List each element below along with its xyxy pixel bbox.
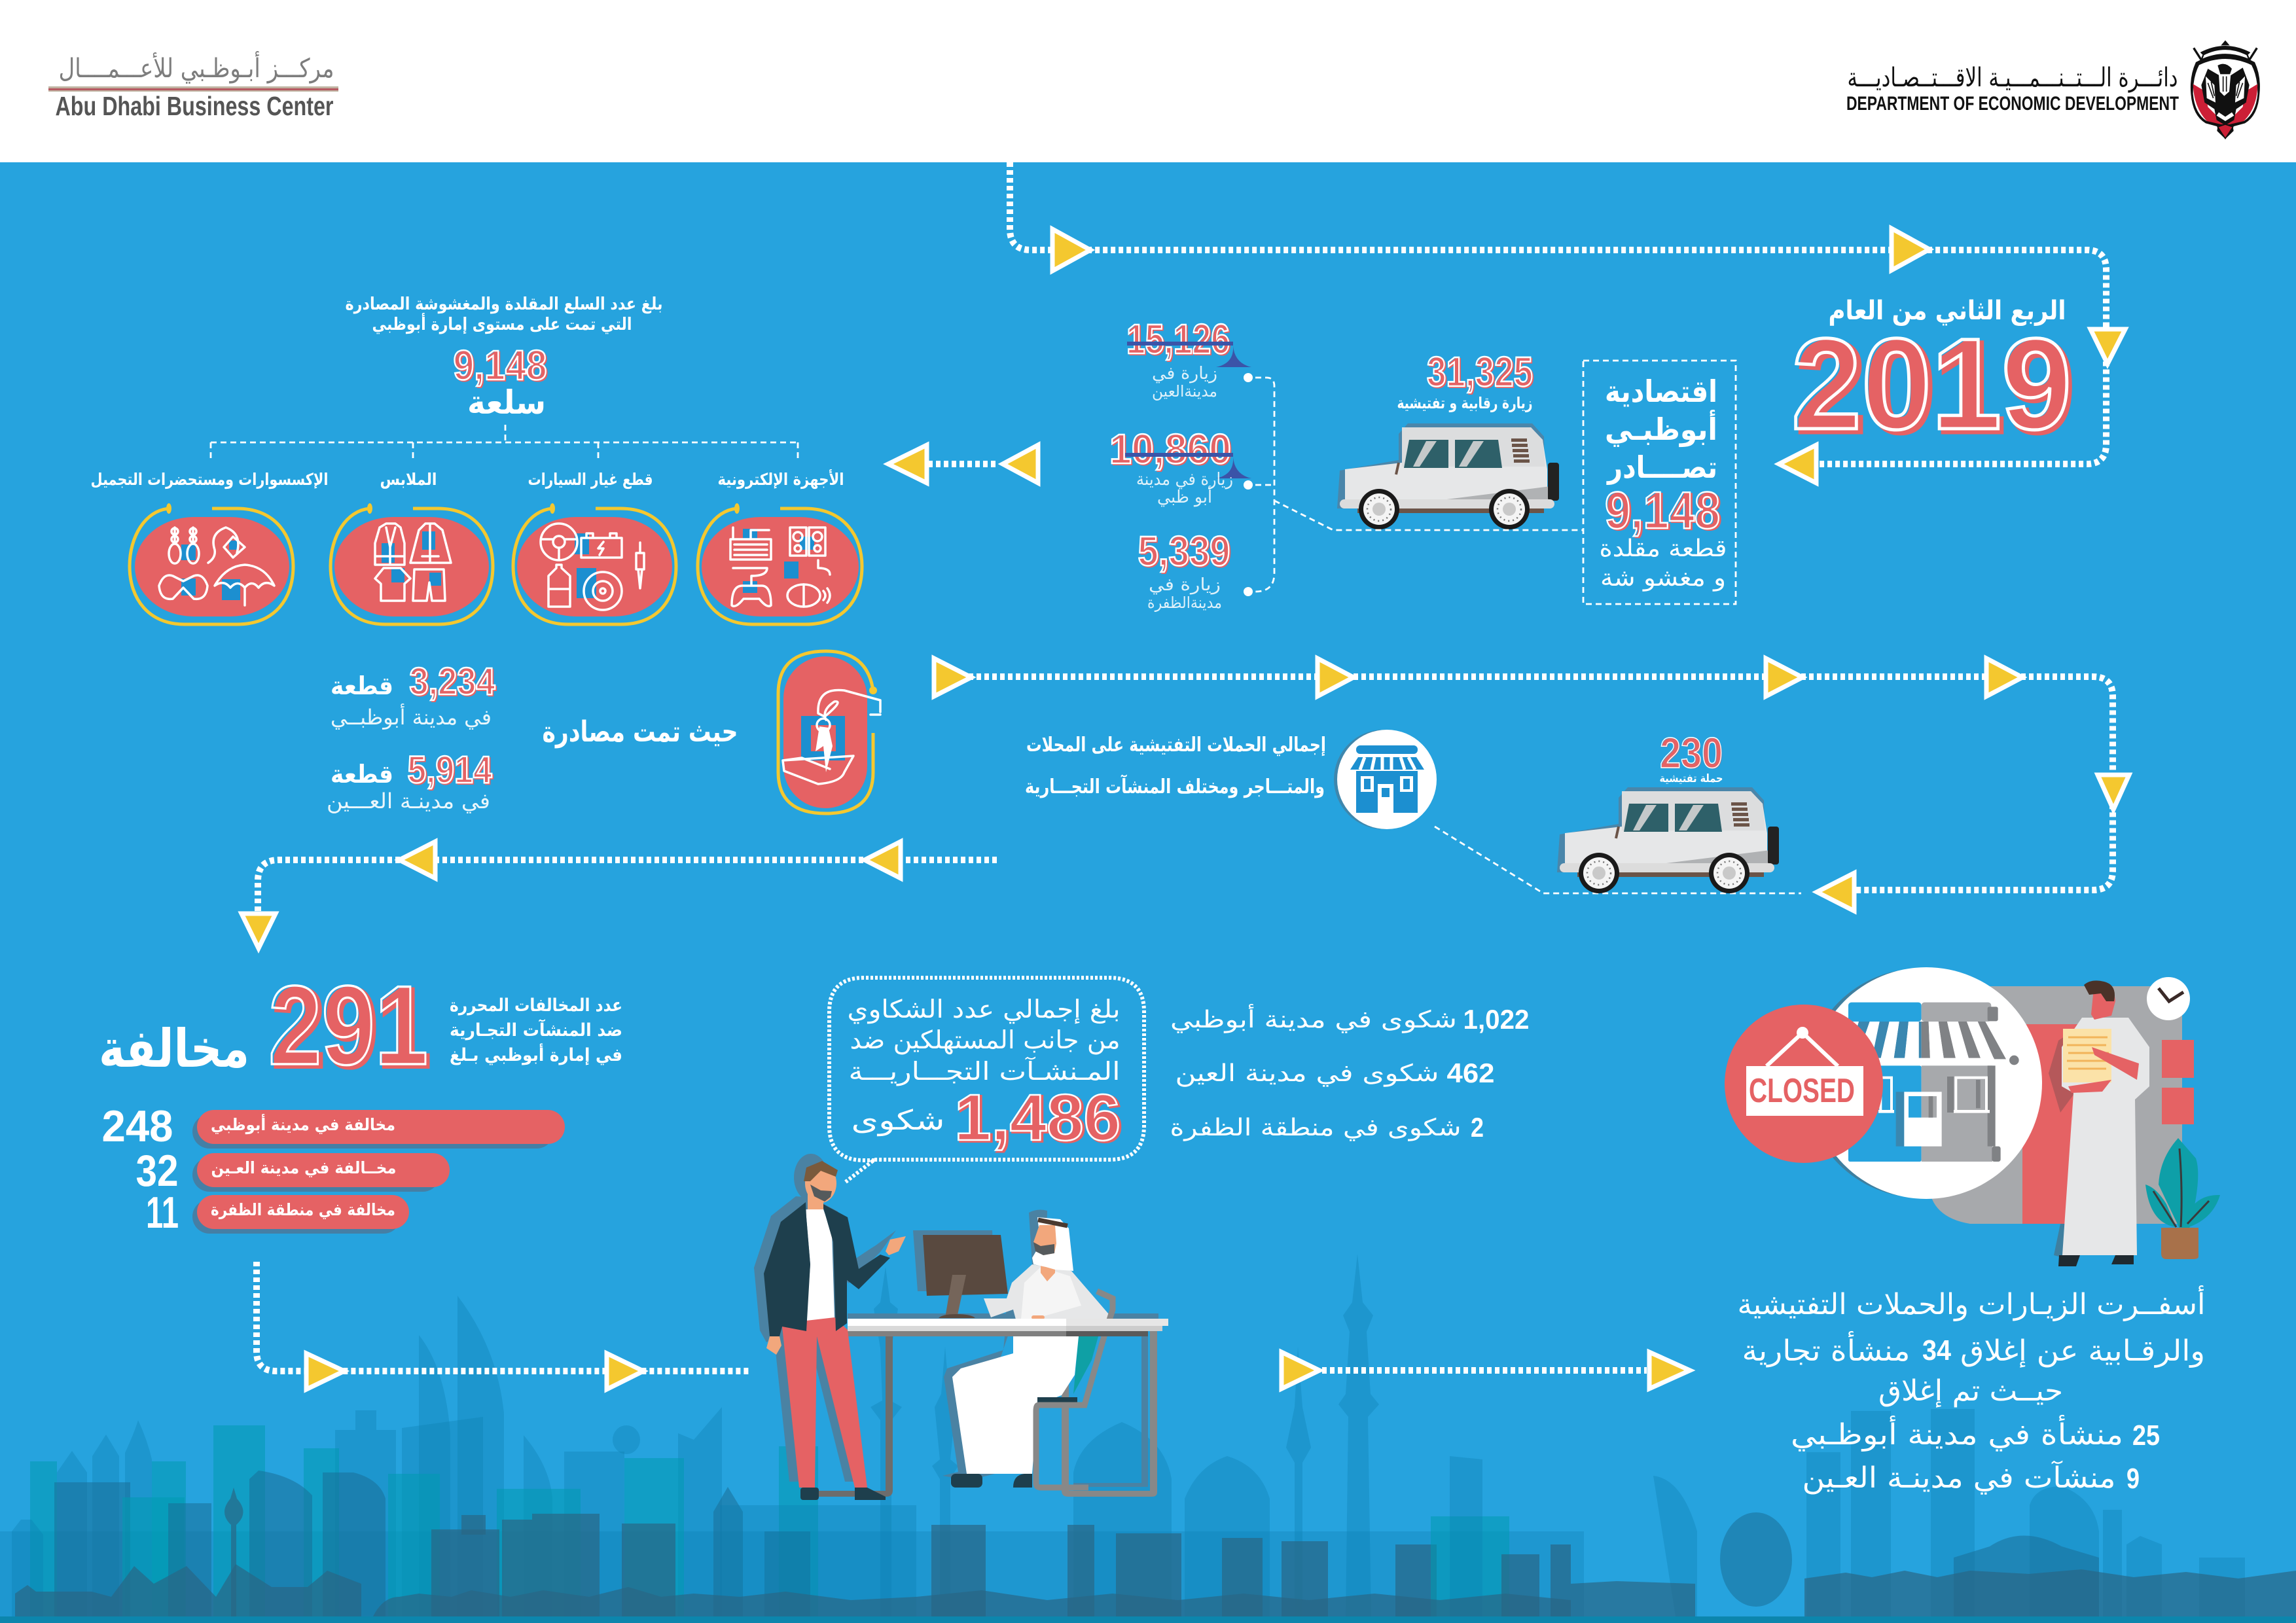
panel: confiscation summary box: تصــــادر <box>1606 450 1717 485</box>
text: confiscated goods intro: التي تمت على مستوى إمارة أبوظبي <box>372 313 632 334</box>
circle with store <box>1805 967 2042 1199</box>
bar: Abu Dhabi 248: 248 <box>102 1101 173 1151</box>
flow line: to closures <box>1282 1352 1690 1389</box>
text: closures summary <box>1737 1285 2206 1495</box>
list: complaints by region: 462 <box>1446 1058 1495 1088</box>
stat: 5,339 Al Dhafra: 5,339 <box>1138 527 1230 575</box>
flow line: to confiscated goods <box>888 445 1038 483</box>
illustration: closed shop <box>1725 967 2220 1266</box>
pill: electronics <box>698 503 862 624</box>
red panel <box>2022 1024 2078 1224</box>
stat: 5,339 Al Dhafra: 5,339 <box>1139 529 1232 576</box>
stat: 3,234 Abu Dhabi: في مدينة أبوظبــي <box>331 704 492 730</box>
arrow right <box>1282 1352 1319 1389</box>
stat: 31,325 visits: 31,325 <box>1428 349 1534 397</box>
text: closures summary: منشآت في مدينـة العـين <box>1803 1460 2115 1495</box>
awning stripes <box>1848 1022 2019 1065</box>
bar: Abu Dhabi 248: مخالفة في مدينة أبوظبي <box>211 1114 395 1135</box>
stat: 10,860 Abu Dhabi: 10,860 <box>1109 425 1231 473</box>
man with papers <box>2049 980 2149 1266</box>
arrow left <box>1003 445 1038 483</box>
text: closures summary: 34 <box>1922 1334 1951 1366</box>
arrow left <box>399 842 435 878</box>
illustration: car <box>1557 787 1779 893</box>
list: complaints by region: 2 <box>1471 1112 1484 1143</box>
illustration: car <box>1337 423 1559 529</box>
stat: 15,126 Al Ain: 15,126 <box>1128 317 1231 364</box>
bar: Al Dhafra 11: 11 <box>146 1188 179 1238</box>
text: closures summary: منشأة في مدينة أبوظـبي <box>1791 1414 2123 1452</box>
stat: 31,325 visits: 31,325 <box>1427 348 1533 395</box>
stat: 5,914 Al Ain: في مدينـة العـــين <box>327 789 490 813</box>
stat: 10,860 Abu Dhabi <box>1109 425 1253 507</box>
stat: 5,914 Al Ain: قطعة <box>331 760 393 789</box>
arrow right <box>1052 229 1090 271</box>
arrow down <box>242 914 276 948</box>
closed sign <box>1725 1005 1883 1163</box>
number: 9,148 goods: 9,148 <box>454 343 548 390</box>
bar: Al Ain 32: مخــالفة في مدينة العـين <box>211 1158 397 1178</box>
stat: 3,234 Abu Dhabi: قطعة <box>331 671 393 700</box>
stat: 230 campaigns: 230 <box>1660 729 1723 777</box>
panel: confiscation summary box: اقتصادية <box>1605 374 1717 409</box>
bar: Al Ain 32: 32 <box>136 1146 178 1196</box>
arrow right <box>1986 658 2022 696</box>
stat: 5,914 Al Ain: 5,914 <box>408 750 493 793</box>
stat: 10,860 Abu Dhabi: 10,860 <box>1111 427 1232 474</box>
arrow right <box>934 658 971 696</box>
number 1,486: 1,486 <box>956 1082 1122 1156</box>
year 2019: 2019 <box>1791 312 2072 456</box>
bar: Abu Dhabi 248 <box>102 1101 565 1151</box>
number 9,148: 9,148 <box>1607 482 1722 541</box>
callout: complaints speech bubble: من جانب المستهلكين ضد <box>850 1026 1121 1055</box>
monitor <box>913 1230 1008 1318</box>
text: closures summary: 25 <box>2132 1419 2160 1452</box>
stat: 15,126 Al Ain <box>1126 315 1253 401</box>
man shadow <box>754 1154 896 1482</box>
text: violations description <box>450 995 622 1065</box>
arrow down <box>2098 775 2129 810</box>
number: 291 violations: 291 <box>272 965 431 1091</box>
desk shadow <box>848 1313 1158 1319</box>
callout: complaints speech bubble: بلغ إجمالي عدد الشكاوي <box>847 995 1121 1024</box>
heading: second quarter: الربع الثاني من العام <box>1829 296 2066 326</box>
panel: confiscation summary box: قطعة مقلدة <box>1600 535 1727 562</box>
flow line: to violations <box>242 842 997 948</box>
clock <box>2147 977 2190 1020</box>
arrow right <box>1766 658 1803 696</box>
flow line: to complaints <box>257 1262 751 1389</box>
connector lines for visits <box>1255 378 1583 592</box>
tree connector <box>211 425 798 459</box>
scalloped edge <box>1872 1058 1994 1064</box>
logo: Department of Economic Development <box>1846 63 2179 115</box>
chair back <box>1073 1336 1098 1394</box>
white awning stripes <box>1857 1022 1994 1059</box>
chair frame <box>1036 1291 1113 1488</box>
pill: car parts <box>513 503 676 624</box>
year 2019: 2019 <box>1796 315 2075 459</box>
icon: store in circle <box>1334 730 1437 829</box>
panel: confiscation summary box: و مغشو شة <box>1600 565 1726 592</box>
grey panel <box>1929 986 2182 1224</box>
arrow down <box>2090 329 2125 364</box>
text: closures summary: أسفــرت الزيـارات والحملات التفتيشية <box>1737 1285 2206 1321</box>
logo: Department of Economic Development: دائـــرة الـــتــنـــمـــيـة الاقـــتــصـاديـــة <box>1847 63 2178 93</box>
arrow left <box>1817 873 1854 911</box>
stat: 10,860 Abu Dhabi: زيارة في مدينة <box>1136 470 1233 490</box>
stat: 3,234 Abu Dhabi: 3,234 <box>411 662 496 704</box>
red side tabs <box>2162 1040 2194 1124</box>
stat: 5,914 Al Ain <box>327 749 493 813</box>
panel: confiscation summary box <box>1583 361 1736 604</box>
number: 9,148 goods: سلعة <box>467 383 546 421</box>
bar: Al Dhafra 11: مخالفة في منطقة الظفرة <box>211 1200 395 1220</box>
minarets and mosque <box>870 1267 902 1616</box>
stat: 31,325 visits: زيارة رقابية و تفتيشية <box>1397 394 1533 412</box>
callout: complaints speech bubble <box>829 978 1144 1182</box>
category label: electronics: الأجهزة الإلكترونية <box>717 469 844 490</box>
stat: 3,234 Abu Dhabi <box>331 660 496 730</box>
connector: store to car <box>1435 827 1801 893</box>
text: campaigns description <box>1025 734 1326 798</box>
stat: 5,914 Al Ain: 5,914 <box>407 749 492 791</box>
text: closures summary: 9 <box>2126 1463 2140 1495</box>
text: closures summary: منشأة تجارية <box>1742 1330 1910 1368</box>
list: complaints by region: شكوى في مدينة العين <box>1175 1060 1439 1087</box>
logo: Abu Dhabi Business Center: مركـــز أبـوظـبي للأعـــمــــال <box>59 51 334 84</box>
text: confiscated goods intro <box>346 294 662 334</box>
flow line: inspection campaigns <box>934 658 2129 911</box>
stat: 10,860 Abu Dhabi: أبو ظبي <box>1157 485 1212 507</box>
number: 291 violations: 291 <box>268 963 428 1088</box>
arrow left <box>865 842 901 878</box>
closed sign: CLOSED <box>1749 1072 1855 1110</box>
bar: Al Dhafra 11 <box>146 1188 409 1238</box>
number: 9,148 goods <box>453 342 548 421</box>
heading: violations word: مخالفة <box>99 1018 249 1079</box>
icon pill: hand receiving key <box>778 651 880 813</box>
seated man <box>951 1217 1109 1488</box>
stat: 230 campaigns: 230 <box>1660 728 1723 777</box>
number 1,486: 1,486 <box>954 1081 1121 1154</box>
text: violations description: ضد المنشآت التجـارية <box>450 1019 622 1041</box>
arrow right <box>607 1353 643 1389</box>
list: complaints by region <box>1170 1004 1529 1143</box>
stat: 3,234 Abu Dhabi: 3,234 <box>410 660 495 703</box>
potted plant <box>2145 1138 2220 1259</box>
category label: accessories: الإكسسوارات ومستحضرات التجميل <box>90 470 329 490</box>
arrow left <box>1779 445 1816 483</box>
flow line: 2019 <box>1010 162 2125 483</box>
stat: 31,325 visits <box>1397 348 1534 412</box>
standing man <box>764 1161 906 1500</box>
stat: 5,339 Al Dhafra: مدينةالظفرة <box>1147 594 1222 612</box>
store body <box>1848 1065 2001 1162</box>
text: confiscated where: حيث تمت مصادرة <box>542 715 738 749</box>
number: 9,148 goods: 9,148 <box>453 342 547 389</box>
stat: 15,126 Al Ain: مدينةالعين <box>1152 382 1217 401</box>
stat: 230 campaigns: حملة تفتيشية <box>1660 772 1723 785</box>
bar: Al Ain 32 <box>136 1146 450 1196</box>
category label: clothes: الملابس <box>380 470 437 489</box>
callout: complaints speech bubble: شكوى <box>851 1104 945 1136</box>
desk frame <box>816 1331 1157 1497</box>
stat: 15,126 Al Ain: 15,126 <box>1126 315 1230 363</box>
text: confiscated goods intro: بلغ عدد السلع المقلدة والمغشوشة المصادرة <box>346 294 662 314</box>
seated man shadow <box>942 1210 1047 1480</box>
logo: Abu Dhabi Business Center <box>48 51 338 121</box>
text: closures summary: حيــث تم إغلاق <box>1878 1374 2063 1408</box>
text: closures summary: والرقـابية عن إغلاق <box>1960 1334 2205 1368</box>
top bar <box>1848 1003 1998 1022</box>
list: complaints by region: شكوى في مدينة أبوظبي <box>1170 1004 1457 1033</box>
list: complaints by region: 1,022 <box>1463 1004 1529 1035</box>
text: campaigns description: إجمالي الحملات التفتيشية على المحلات <box>1026 734 1326 757</box>
text: campaigns description: والمتـــاجر ومختلف المنشآت التجـــارية <box>1025 774 1325 798</box>
illustration: desk with two men <box>754 1154 1168 1500</box>
text: violations description: في إمارة أبوظبي بـلغ <box>450 1043 622 1065</box>
stat: 5,339 Al Dhafra <box>1138 527 1253 612</box>
icon: falcon emblem <box>2191 41 2260 139</box>
callout: complaints speech bubble: المـنشـآت التجـــاريـــة <box>848 1056 1121 1086</box>
desk top <box>848 1319 1168 1336</box>
logo: Department of Economic Development: DEPARTMENT OF ECONOMIC DEVELOPMENT <box>1846 93 2179 115</box>
panel: confiscation summary box: أبوظبـي <box>1605 410 1717 447</box>
arrow right <box>1649 1352 1690 1389</box>
arrow right <box>306 1353 344 1389</box>
logo: Abu Dhabi Business Center: Abu Dhabi Business Center <box>55 91 334 121</box>
number 9,148: 9,148 <box>1605 481 1720 539</box>
stat: 5,339 Al Dhafra: زيارة في <box>1149 575 1221 595</box>
arrow left <box>888 445 927 483</box>
stat: 15,126 Al Ain: زيارة في <box>1152 364 1217 383</box>
pill: clothes <box>331 503 493 624</box>
category label: car parts: قطع غيار السيارات <box>528 470 653 490</box>
arrow right <box>1318 658 1354 696</box>
skyline silhouette <box>0 1254 2296 1623</box>
header white band <box>0 0 2296 162</box>
arrow right <box>1892 228 1929 270</box>
pill: accessories <box>130 503 293 624</box>
list: complaints by region: شكوى في منطقة الظفرة <box>1170 1115 1461 1141</box>
text: violations description: عدد المخالفات المحررة <box>450 995 622 1016</box>
